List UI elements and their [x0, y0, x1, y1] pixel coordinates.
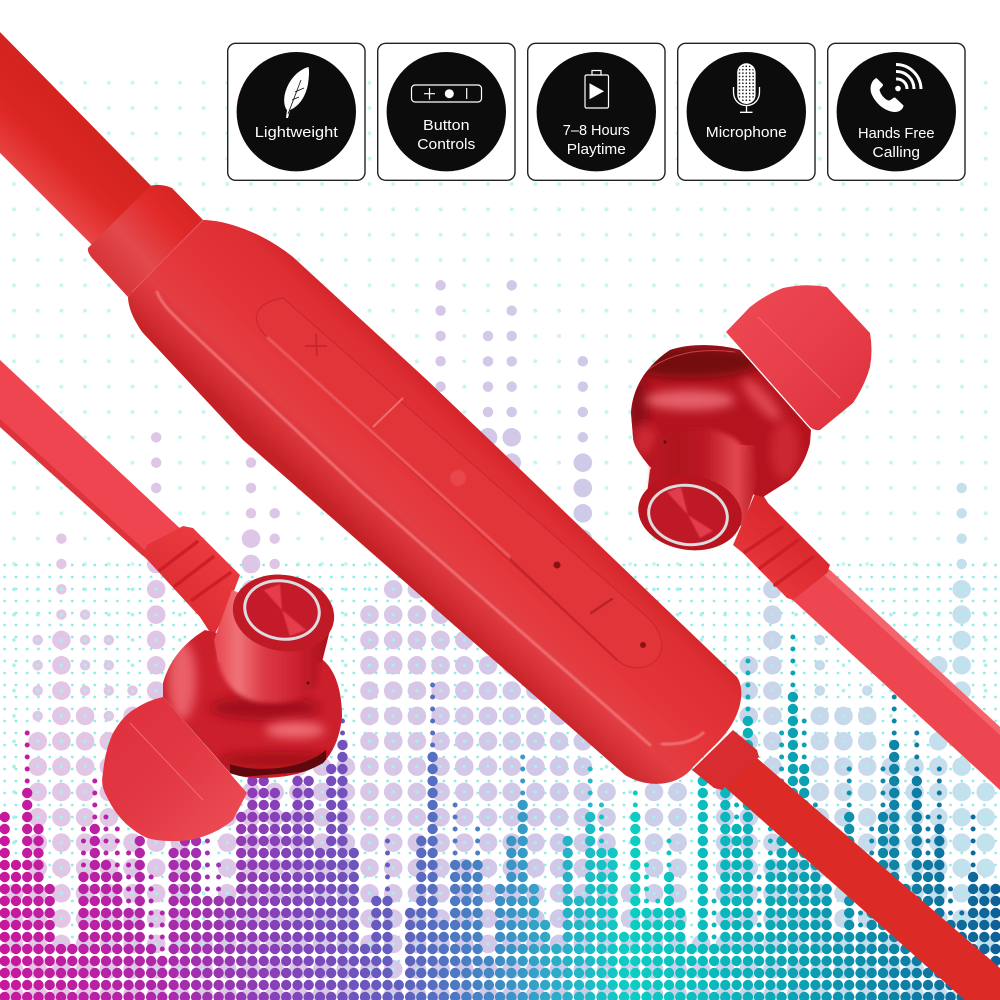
left cap light wedges [264, 584, 306, 636]
label: hands free calling: Calling [873, 144, 920, 161]
right earbud cap [633, 469, 747, 557]
right flat cable [785, 563, 1000, 790]
cyan dots over lavender [0, 575, 1000, 1000]
icon: phone with signal [871, 64, 921, 112]
left cap ring [238, 573, 326, 647]
lower cable collar [692, 730, 759, 790]
panel lower edge shadow [510, 559, 617, 660]
feature card: button controls [378, 43, 515, 180]
lower right flat cable [718, 752, 1000, 1000]
colored equalizer bars [5, 636, 996, 997]
right earbud base [631, 345, 811, 497]
feature card: hands free calling [828, 43, 965, 180]
label: hands free calling: Hands Free [858, 125, 935, 142]
label: playtime: 7–8 Hours [563, 122, 630, 139]
right cap ring [643, 479, 733, 551]
label: microphone: Microphone [706, 124, 787, 141]
label: button controls [417, 117, 475, 153]
feature card: microphone [678, 43, 815, 180]
collar seam [132, 220, 203, 292]
neck cable [0, 32, 165, 258]
right earbud stem lower [645, 445, 757, 540]
label: hands free calling [858, 125, 935, 161]
right earbud [631, 345, 811, 550]
icon: battery [585, 70, 608, 108]
right cap disc [646, 482, 730, 548]
mic hole [554, 562, 560, 568]
lavender equalizer dots [14, 285, 986, 995]
right grip [733, 487, 830, 600]
label: button controls: Button [423, 117, 470, 134]
minus mark [591, 599, 612, 613]
right earbud stem flare [650, 429, 755, 535]
label: button controls: Controls [417, 136, 475, 153]
body ridge highlight [157, 292, 703, 745]
left earbud base [163, 630, 342, 778]
left grip [143, 526, 240, 637]
panel divider [373, 398, 403, 427]
panel lower edge highlight [267, 337, 510, 557]
left cap disc [242, 577, 322, 643]
left earbud cap [227, 567, 340, 659]
lower left flat cable [0, 360, 185, 562]
label: playtime [563, 122, 630, 158]
label: playtime: Playtime [567, 141, 626, 158]
feature card: lightweight [228, 43, 365, 180]
label: lightweight: Lightweight [255, 124, 339, 141]
round bump [450, 470, 466, 486]
plus mark [304, 333, 328, 357]
icon: button bar [412, 85, 482, 102]
feature card: playtime [528, 43, 665, 180]
control body [128, 220, 741, 784]
icon: feather [284, 67, 309, 118]
left eartip [102, 697, 247, 841]
left earbud stem flare [218, 600, 326, 703]
indicator hole [640, 642, 646, 648]
right earbud hole [664, 440, 666, 444]
right cap light wedges [667, 487, 713, 538]
button panel [256, 298, 662, 668]
left earbud [163, 574, 342, 778]
left earbud hole [306, 682, 310, 684]
left earbud stem upper [214, 590, 330, 662]
right eartip [726, 285, 872, 430]
icon: microphone [734, 63, 760, 112]
upper collar [88, 185, 205, 297]
